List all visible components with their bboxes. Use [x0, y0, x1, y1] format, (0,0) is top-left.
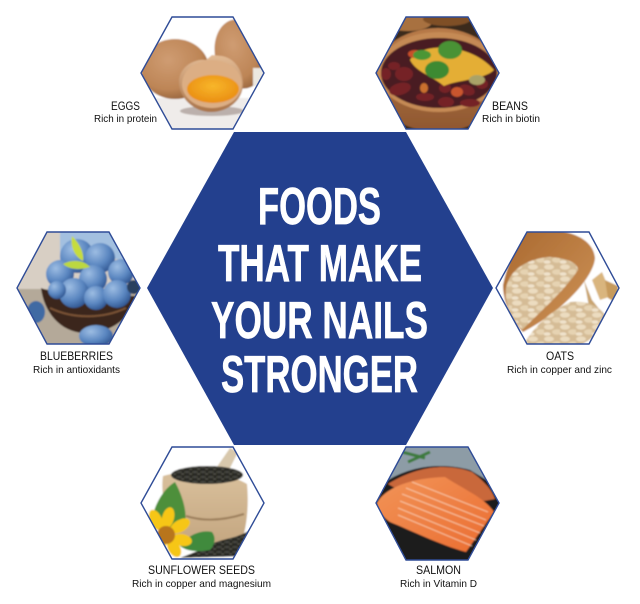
title: FOODS [258, 178, 381, 236]
label: eggs: Rich in protein [94, 113, 157, 125]
label: beans: BEANS [492, 99, 528, 113]
title: THAT MAKE [218, 235, 422, 293]
central hexagon panel with title [147, 132, 493, 445]
title: STRONGER [221, 346, 418, 404]
label: oats: Rich in copper and zinc [507, 364, 612, 376]
food hexagon: oats [493, 229, 623, 347]
label: blueberries: BLUEBERRIES [40, 349, 113, 363]
food hexagon: blueberries [14, 229, 144, 347]
label: oats: OATS [546, 349, 574, 363]
label: blueberries: Rich in antioxidants [33, 364, 120, 376]
label: eggs: EGGS [111, 99, 140, 113]
label: eggs [94, 99, 157, 125]
food hexagon: eggs [138, 14, 272, 132]
title [211, 178, 428, 404]
label: oats [507, 349, 612, 376]
label: beans: Rich in biotin [482, 113, 540, 125]
label: salmon [400, 563, 477, 590]
label: sunflower seeds [132, 563, 271, 590]
title: YOUR NAILS [211, 292, 428, 350]
label: beans [482, 99, 540, 125]
label: sunflower seeds: Rich in copper and magnesium [132, 578, 271, 590]
food hexagon: sunflower seeds [138, 444, 268, 562]
food hexagon: beans [375, 16, 500, 130]
label: salmon: Rich in Vitamin D [400, 578, 477, 590]
label: salmon: SALMON [416, 563, 461, 577]
food hexagon: salmon [373, 444, 503, 562]
label: sunflower seeds: SUNFLOWER SEEDS [148, 563, 255, 577]
label: blueberries [33, 349, 120, 376]
